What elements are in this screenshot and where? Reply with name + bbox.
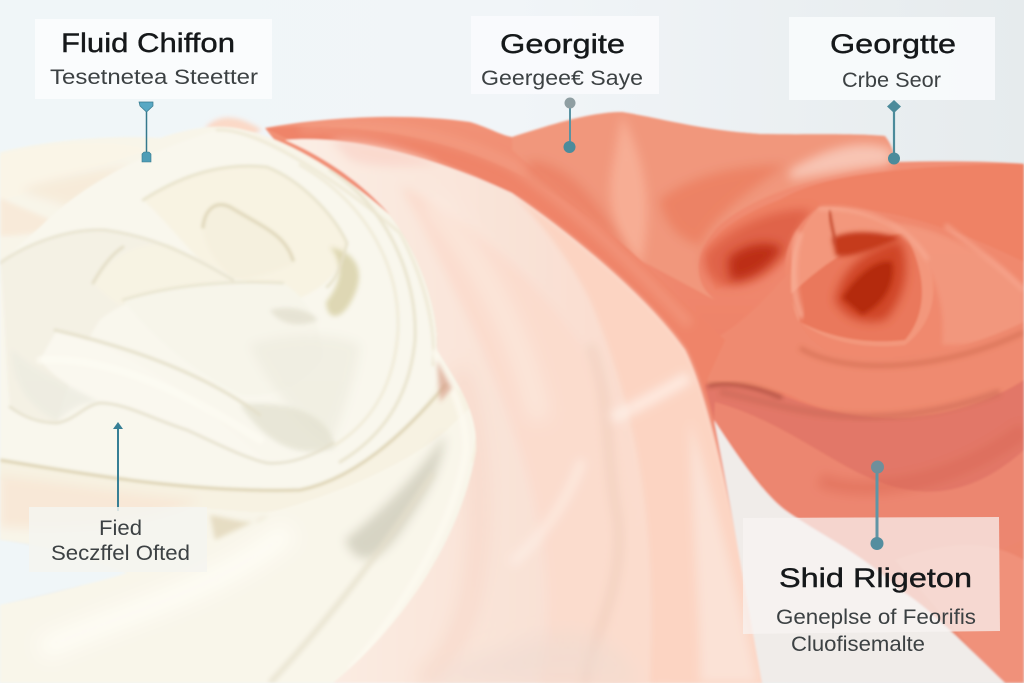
label: Shid Rligeton — [743, 517, 1000, 656]
label: Fluid Chiffon — [35, 19, 272, 99]
ivory: sheer net shadows — [282, 340, 354, 430]
fabric: dark edge between ivory and peach — [437, 360, 452, 402]
description line one: Geneplse of Feorifis — [776, 606, 976, 629]
label panel — [471, 16, 659, 94]
label panel — [743, 517, 1000, 634]
heading: Georgite — [500, 29, 625, 59]
label panel — [29, 507, 207, 572]
subheading: Crbe Seor — [842, 69, 941, 92]
callout pin: Georgite — [564, 98, 576, 153]
ivory: lower sweeps — [0, 383, 476, 512]
line two: Seczffel Ofted — [51, 542, 190, 565]
ivory: back left layers — [0, 143, 150, 200]
heading: Fluid Chiffon — [61, 28, 235, 58]
callout pin: Fluid Chiffon — [139, 102, 153, 162]
label panel — [789, 17, 995, 100]
callout pin: Shid Rligeton — [870, 460, 884, 550]
fabric: ivory fluid chiffon — [0, 127, 478, 683]
heading: Shid Rligeton — [779, 563, 972, 593]
subheading: Tesetnetea Steetter — [50, 66, 258, 89]
label: Fied — [29, 507, 207, 572]
heading: Georgtte — [830, 29, 956, 59]
fabric: back flap peach tip — [205, 118, 262, 142]
label: Georgtte — [789, 17, 995, 100]
label: Georgite — [471, 16, 659, 94]
fabric: white sheer drape lower right — [714, 420, 1005, 683]
ivory: fold lines — [0, 130, 433, 463]
label panel — [35, 19, 272, 99]
description line two: Cluofisemalte — [791, 633, 925, 656]
fabric: coral georgette — [265, 112, 1024, 683]
line one: Fied — [99, 517, 142, 540]
callout pin: Georgtte — [887, 100, 901, 164]
subheading: Geergee€ Saye — [481, 67, 643, 90]
callout arrow: Fied — [113, 422, 123, 511]
ivory: top rose layer — [34, 170, 122, 234]
fabric: pale peach drape — [285, 139, 762, 683]
